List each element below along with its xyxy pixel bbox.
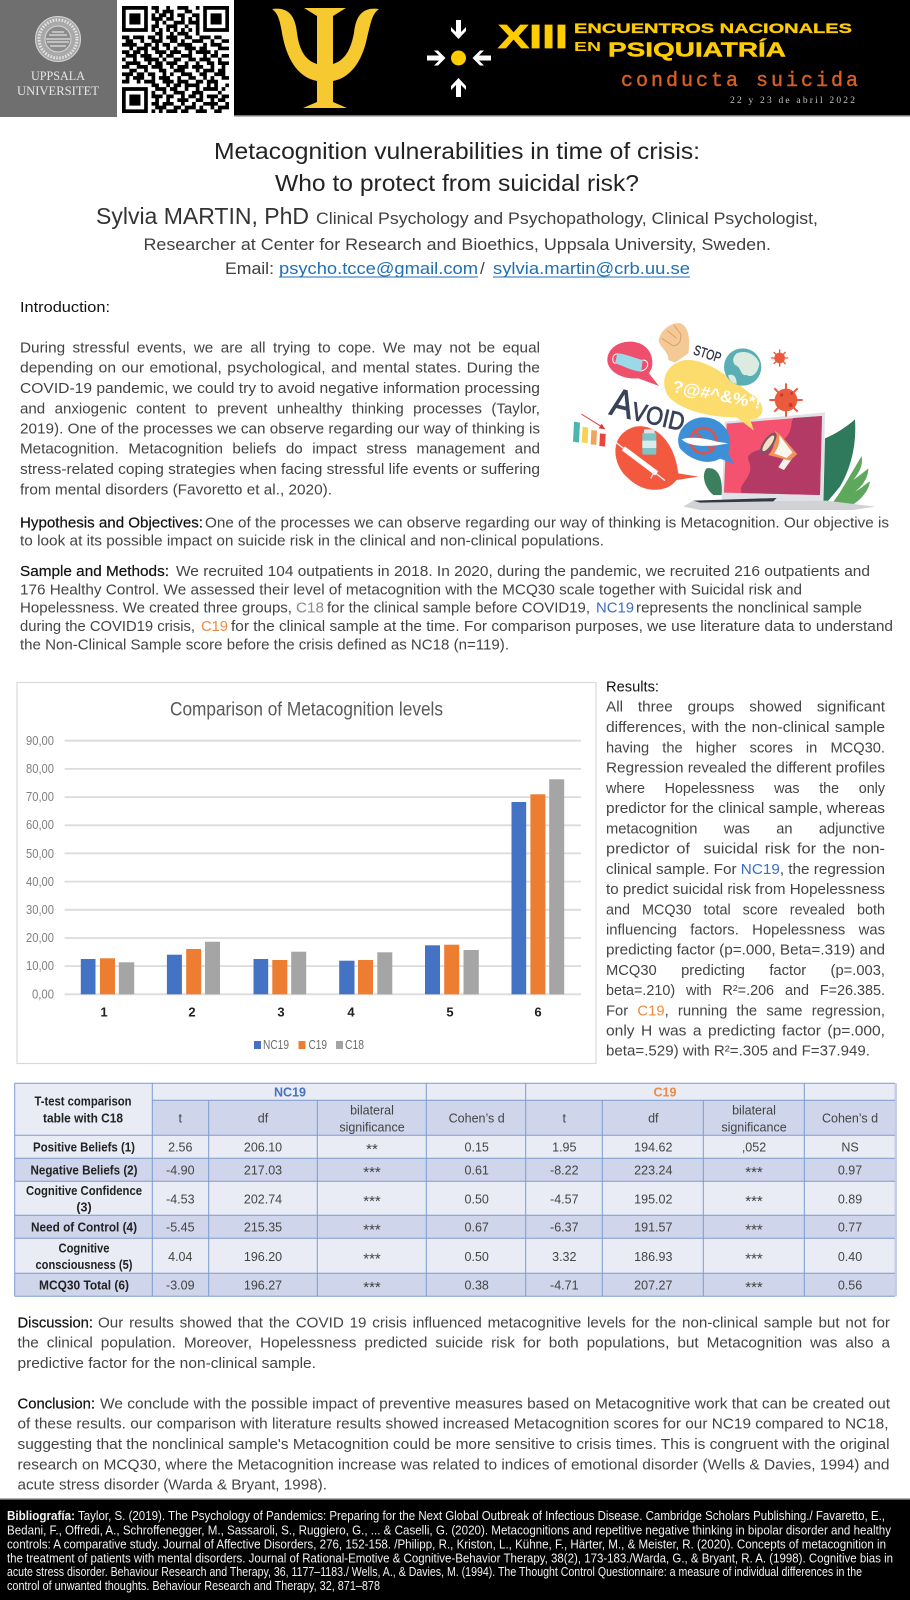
text block: discussion: Discussion:: [18, 1315, 93, 1331]
row: cognitive consciousness: ***: [363, 1251, 381, 1268]
text block: discussion: [18, 1315, 891, 1372]
conference title: PSIQUIATRÍA: [608, 38, 786, 62]
row: need of control: ***: [363, 1221, 381, 1238]
leaves: [704, 419, 870, 510]
text block: discussion: Our results showed that the COVID 19 crisis influenced metacognitive levels for the non-clinical sample but not for: [98, 1315, 890, 1331]
row: negative beliefs: Negative Beliefs (2): [30, 1163, 138, 1177]
y axis labels: 90,00: [26, 734, 54, 748]
text block: results: For C19, running the same regression,: [606, 1003, 885, 1019]
panel: bibliography: Bibliografía:: [7, 1508, 75, 1523]
row: cognitive confidence: ***: [363, 1193, 381, 1210]
text block: hypothesis and objectives: [20, 515, 889, 550]
bars: C19: [100, 794, 545, 994]
table headers: table with C18: [43, 1111, 123, 1125]
text block: results: beta=.210) with R²=.206 and F=26.385.: [606, 983, 885, 999]
row: positive beliefs: 2.56: [168, 1141, 193, 1155]
table headers: significance: [721, 1121, 787, 1135]
panel: bibliography: control of unwanted thoughts. Behaviour Research and Therapy, 32, 871–878: [7, 1578, 380, 1593]
conference title: ENCUENTROS NACIONALES: [574, 20, 852, 36]
text block: introduction: depending on our emotional, psychological, and mental states. During the: [20, 361, 540, 377]
row: need of control: 0.77: [838, 1221, 862, 1235]
text block: hypothesis and objectives: to look at its possible impact on suicide risk in the clinical and non-clinical populations.: [20, 534, 604, 550]
text block: results: where Hopelessness was the only: [605, 781, 886, 797]
table headers: df: [648, 1112, 659, 1126]
text block: results: having the higher scores in MCQ30.: [606, 740, 885, 756]
row: cognitive consciousness: 0.50: [465, 1250, 489, 1264]
heading: results: Results:: [606, 680, 659, 696]
x axis category labels: 5: [446, 1005, 454, 1020]
panel: bar chart: [17, 682, 596, 1064]
row: cognitive consciousness: 4.04: [168, 1250, 193, 1264]
row: MCQ30 total: 207.27: [634, 1278, 672, 1292]
table headers: NC19: [274, 1086, 306, 1100]
row: cognitive confidence: 202.74: [244, 1192, 282, 1206]
row: MCQ30 total: 196.27: [244, 1278, 282, 1292]
text block: sample and methods: We recruited 104 outpatients in 2018. In 2020, during the pandemic, we recruited 216 outpatients and: [176, 564, 870, 580]
text block: results: clinical sample. For NC19, the regression: [606, 862, 885, 878]
row: cognitive consciousness: consciousness (5): [36, 1258, 132, 1272]
row: positive beliefs: ,052: [742, 1141, 766, 1155]
row: MCQ30 total: -4.71: [550, 1278, 579, 1292]
y axis labels: 50,00: [26, 847, 54, 861]
row: need of control: -6.37: [550, 1221, 579, 1235]
x axis category labels: [100, 1005, 542, 1020]
x axis category labels: 4: [347, 1005, 355, 1020]
panel: bibliography: [0, 1498, 910, 1600]
row: MCQ30 total: 0.38: [465, 1278, 489, 1292]
text block: results: only H was a predicting factor (p=.000,: [606, 1024, 885, 1040]
text block: conclusion: research on MCQ30, where the Metacognition increase was related to indices of emotional disorder (Wells & Davies, 1994) and: [18, 1457, 890, 1473]
title: Who to protect from suicidal risk?: [275, 170, 639, 196]
text block: discussion: the clinical population. Moreover, Hopelessness predicted suicide risk for both populations, but Metacognition was also a: [18, 1336, 891, 1352]
row: negative beliefs: -8.22: [550, 1163, 579, 1177]
row: cognitive confidence: 0.89: [838, 1192, 862, 1206]
text block: introduction: stress-related coping strategies when facing stressful life events or suffering: [20, 462, 540, 478]
heading: introduction: Introduction:: [20, 300, 110, 316]
row: negative beliefs: 0.97: [838, 1163, 862, 1177]
row: cognitive confidence: ***: [745, 1193, 763, 1210]
stop label: STOP: [692, 342, 723, 366]
text block: sample and methods: NC19: [596, 601, 634, 617]
row: MCQ30 total: ***: [745, 1279, 763, 1296]
text block: sample and methods: C19: [201, 619, 228, 635]
text block: results: and MCQ30 total score revealed both: [606, 902, 885, 918]
row: cognitive confidence: [26, 1184, 862, 1215]
chart legend: NC19: [263, 1038, 289, 1052]
text block: sample and methods: Sample and Methods:: [20, 564, 169, 580]
row: need of control: 0.67: [465, 1221, 489, 1235]
conference title: 22 y 23 de abril 2022: [730, 96, 855, 106]
text block: results: predictor of suicidal risk for the non-: [606, 842, 885, 858]
chart legend: [254, 1038, 364, 1052]
pink mask bubble: [607, 342, 659, 386]
text block: results: [605, 700, 886, 1060]
chart title: Comparison of Metacognition levels: [170, 700, 443, 721]
text block: hypothesis and objectives: Hypothesis and Objectives:: [20, 515, 203, 531]
y axis labels: 10,00: [26, 959, 54, 973]
table: t-test comparison: [15, 1083, 897, 1296]
globe: [724, 348, 761, 386]
logo: Uppsala Universitet: UNIVERSITET: [17, 84, 99, 98]
row: positive beliefs: 206.10: [244, 1141, 282, 1155]
table headers: T-test comparison: [34, 1095, 132, 1109]
row: positive beliefs: Positive Beliefs (1): [33, 1141, 135, 1155]
table headers: bilateral: [732, 1103, 776, 1117]
row: negative beliefs: -4.90: [166, 1163, 195, 1177]
row: cognitive consciousness: Cognitive: [58, 1241, 110, 1255]
yellow speech bubble: ?@#^&%*!: [671, 377, 763, 413]
title: [214, 138, 700, 196]
text block: results: Regression revealed the different profiles: [606, 761, 885, 777]
row: MCQ30 total: [39, 1278, 862, 1296]
table headers: C19: [654, 1086, 677, 1100]
text block: sample and methods: for the clinical sample before COVID19,: [327, 601, 590, 617]
y axis labels: [26, 734, 54, 1002]
bars: NC19: [81, 802, 526, 994]
conference title: XIII: [498, 18, 568, 55]
row: MCQ30 total: MCQ30 Total (6): [39, 1278, 129, 1292]
chart legend: C19: [308, 1038, 327, 1052]
conference title: conducta suicida: [621, 70, 858, 93]
author and contact block: Sylvia MARTIN, PhD: [96, 203, 309, 229]
row: need of control: -5.45: [166, 1221, 195, 1235]
y axis labels: 70,00: [26, 790, 54, 804]
text block: sample and methods: C18: [296, 601, 324, 617]
author and contact block: Email:: [225, 259, 274, 278]
fist: [659, 323, 689, 363]
QR code: [118, 0, 233, 117]
text block: sample and methods: [20, 564, 893, 653]
row: cognitive consciousness: 196.20: [244, 1250, 282, 1264]
row: positive beliefs: **: [366, 1141, 378, 1158]
row: negative beliefs: [30, 1163, 862, 1181]
row: positive beliefs: 1.95: [552, 1141, 577, 1155]
virus icons: [769, 349, 803, 417]
y axis labels: 20,00: [26, 931, 54, 945]
table headers: Cohen’s d: [822, 1112, 878, 1126]
table headers: bilateral: [350, 1103, 394, 1117]
yellow speech bubble: [664, 360, 763, 431]
row: MCQ30 total: -3.09: [166, 1278, 195, 1292]
row: need of control: 215.35: [244, 1221, 282, 1235]
x axis category labels: 1: [100, 1005, 108, 1020]
row: cognitive consciousness: 3.32: [552, 1250, 577, 1264]
table headers: significance: [339, 1121, 405, 1135]
y axis labels: 40,00: [26, 875, 54, 889]
text block: introduction: 2019). One of the processes we can observe regarding our way of thinking is: [20, 422, 540, 438]
row: MCQ30 total: 0.56: [838, 1278, 862, 1292]
table headers: [34, 1086, 878, 1135]
laptop: [683, 412, 875, 510]
conference title: [498, 18, 858, 106]
text block: results: predictor for the clinical sample, whereas: [606, 801, 885, 817]
author and contact block: psycho.tcce@gmail.com: [279, 259, 478, 278]
row: need of control: 191.57: [634, 1221, 672, 1235]
row: cognitive confidence: -4.57: [550, 1192, 579, 1206]
red syringe bubble: [613, 426, 698, 490]
blue no-fly bubble: [678, 417, 734, 464]
row: cognitive consciousness: ***: [745, 1251, 763, 1268]
falling bar chart icon: [573, 414, 606, 447]
table headers: t: [179, 1112, 183, 1126]
text block: sample and methods: Hopelessness. We created three groups,: [20, 601, 292, 617]
author and contact block: sylvia.martin@crb.uu.se: [493, 259, 690, 278]
megaphone: [757, 430, 797, 470]
row: cognitive confidence: 195.02: [634, 1192, 672, 1206]
illustration: avoid infodemic: [573, 323, 875, 510]
text block: results: influencing factors. Hopelessness was: [606, 922, 885, 938]
y axis labels: 0,00: [32, 988, 54, 1002]
text block: introduction: [20, 341, 540, 498]
row: need of control: ***: [745, 1221, 763, 1238]
table headers: df: [258, 1112, 269, 1126]
row: cognitive consciousness: 0.40: [838, 1250, 862, 1264]
logo: Uppsala Universitet: [0, 0, 117, 117]
row: negative beliefs: 0.61: [465, 1163, 489, 1177]
row: negative beliefs: ***: [363, 1164, 381, 1181]
row: need of control: Need of Control (4): [31, 1221, 137, 1235]
x axis category labels: 3: [277, 1005, 285, 1020]
y axis labels: 30,00: [26, 903, 54, 917]
text block: sample and methods: the Non-Clinical Sample score before the crisis defined as NC18 (n=119).: [20, 637, 509, 653]
text block: introduction: COVID-19 pandemic, we could try to avoid negative information processing: [20, 381, 540, 397]
text block: sample and methods: represents the nonclinical sample: [636, 601, 862, 617]
row: positive beliefs: 194.62: [634, 1141, 672, 1155]
y axis labels: 80,00: [26, 762, 54, 776]
text block: conclusion: acute stress disorder (Warda & Bryant, 1998).: [18, 1478, 327, 1494]
text block: conclusion: suggesting that the nonclinical sample's Metacognition could be more sensitive to crisis times. This is congruent with the original: [18, 1437, 889, 1453]
text block: results: to predict suicidal risk from Hopelessness: [606, 882, 885, 898]
text block: sample and methods: 176 Healthy Control. We assessed their level of metacognition with the MCQ30 scale together with Suicidal risk and: [20, 582, 802, 598]
text block: introduction: and anxiogenic content to prevent unhealthy thinking processes (Taylor,: [20, 401, 540, 417]
row: MCQ30 total: ***: [363, 1279, 381, 1296]
text block: introduction: During stressful events, we are all trying to cope. We may not be equal: [20, 341, 540, 357]
text block: results: metacognition was an adjunctive: [606, 821, 885, 837]
row: positive beliefs: NS: [841, 1141, 859, 1155]
text block: hypothesis and objectives: One of the processes we can observe regarding our way of thinking is Metacognition. Our objective is: [205, 515, 889, 531]
text block: sample and methods: for the clinical sample at the time. For comparison purposes, we use literature data to understand: [231, 619, 893, 635]
row: cognitive confidence: (3): [76, 1201, 92, 1215]
author and contact block: /: [480, 259, 485, 278]
row: negative beliefs: 217.03: [244, 1163, 282, 1177]
text block: results: beta=.529) with R²=.305 and F=37.949.: [606, 1044, 870, 1060]
y axis labels: 60,00: [26, 818, 54, 832]
logo: Uppsala Universitet: UPPSALA: [31, 69, 85, 83]
author and contact block: Researcher at Center for Research and Bioethics, Uppsala University, Sweden.: [144, 235, 771, 254]
author and contact block: [96, 203, 818, 278]
row: cognitive consciousness: [36, 1241, 862, 1272]
icon: psi symbol: [272, 8, 379, 108]
author and contact block: Clinical Psychology and Psychopathology, Clinical Psychologist,: [316, 209, 818, 228]
conference title: EN: [574, 40, 601, 54]
row: positive beliefs: 0.15: [465, 1141, 489, 1155]
text block: results: differences, with the non-clinical sample: [606, 720, 885, 736]
text block: conclusion: [18, 1396, 890, 1494]
row: negative beliefs: ***: [745, 1164, 763, 1181]
chart legend: C18: [345, 1038, 364, 1052]
text block: conclusion: of these results. our comparison with literature results showed increased Metacognition scores for our NC19 compared to NC18,: [18, 1417, 888, 1433]
row: cognitive consciousness: 186.93: [634, 1250, 672, 1264]
text block: introduction: Metacognition. Metacognition beliefs do impact stress management and: [20, 442, 540, 458]
row: cognitive confidence: Cognitive Confidence: [26, 1184, 142, 1198]
text block: conclusion: We conclude with the possible impact of preventive measures based on Metacognitive work that can be created out: [100, 1396, 890, 1412]
title: Metacognition vulnerabilities in time of crisis:: [214, 138, 700, 164]
text block: discussion: predictive factor for the non-clinical sample.: [18, 1356, 316, 1372]
text block: results: predicting factor (p=.000, Beta=.319) and: [606, 943, 885, 959]
x axis category labels: 2: [188, 1005, 196, 1020]
bars: C18: [119, 779, 564, 994]
avoid label: AVOID: [606, 380, 690, 440]
text block: conclusion: Conclusion:: [18, 1396, 95, 1412]
table headers: t: [563, 1112, 567, 1126]
row: cognitive confidence: 0.50: [465, 1192, 489, 1206]
text block: results: All three groups showed significant: [606, 700, 885, 716]
row: positive beliefs: [33, 1141, 859, 1158]
row: negative beliefs: 223.24: [634, 1163, 672, 1177]
header banner: [0, 0, 910, 117]
text block: sample and methods: during the COVID19 crisis,: [20, 619, 195, 635]
table headers: Cohen’s d: [449, 1112, 505, 1126]
text block: results: MCQ30 predicting factor (p=.003,: [606, 963, 885, 979]
text block: introduction: from mental disorders (Favoretto et al., 2020).: [20, 482, 332, 498]
icon: converging arrows: [427, 20, 491, 97]
row: need of control: [31, 1221, 862, 1238]
x axis category labels: 6: [534, 1005, 542, 1020]
row: cognitive confidence: -4.53: [166, 1192, 195, 1206]
